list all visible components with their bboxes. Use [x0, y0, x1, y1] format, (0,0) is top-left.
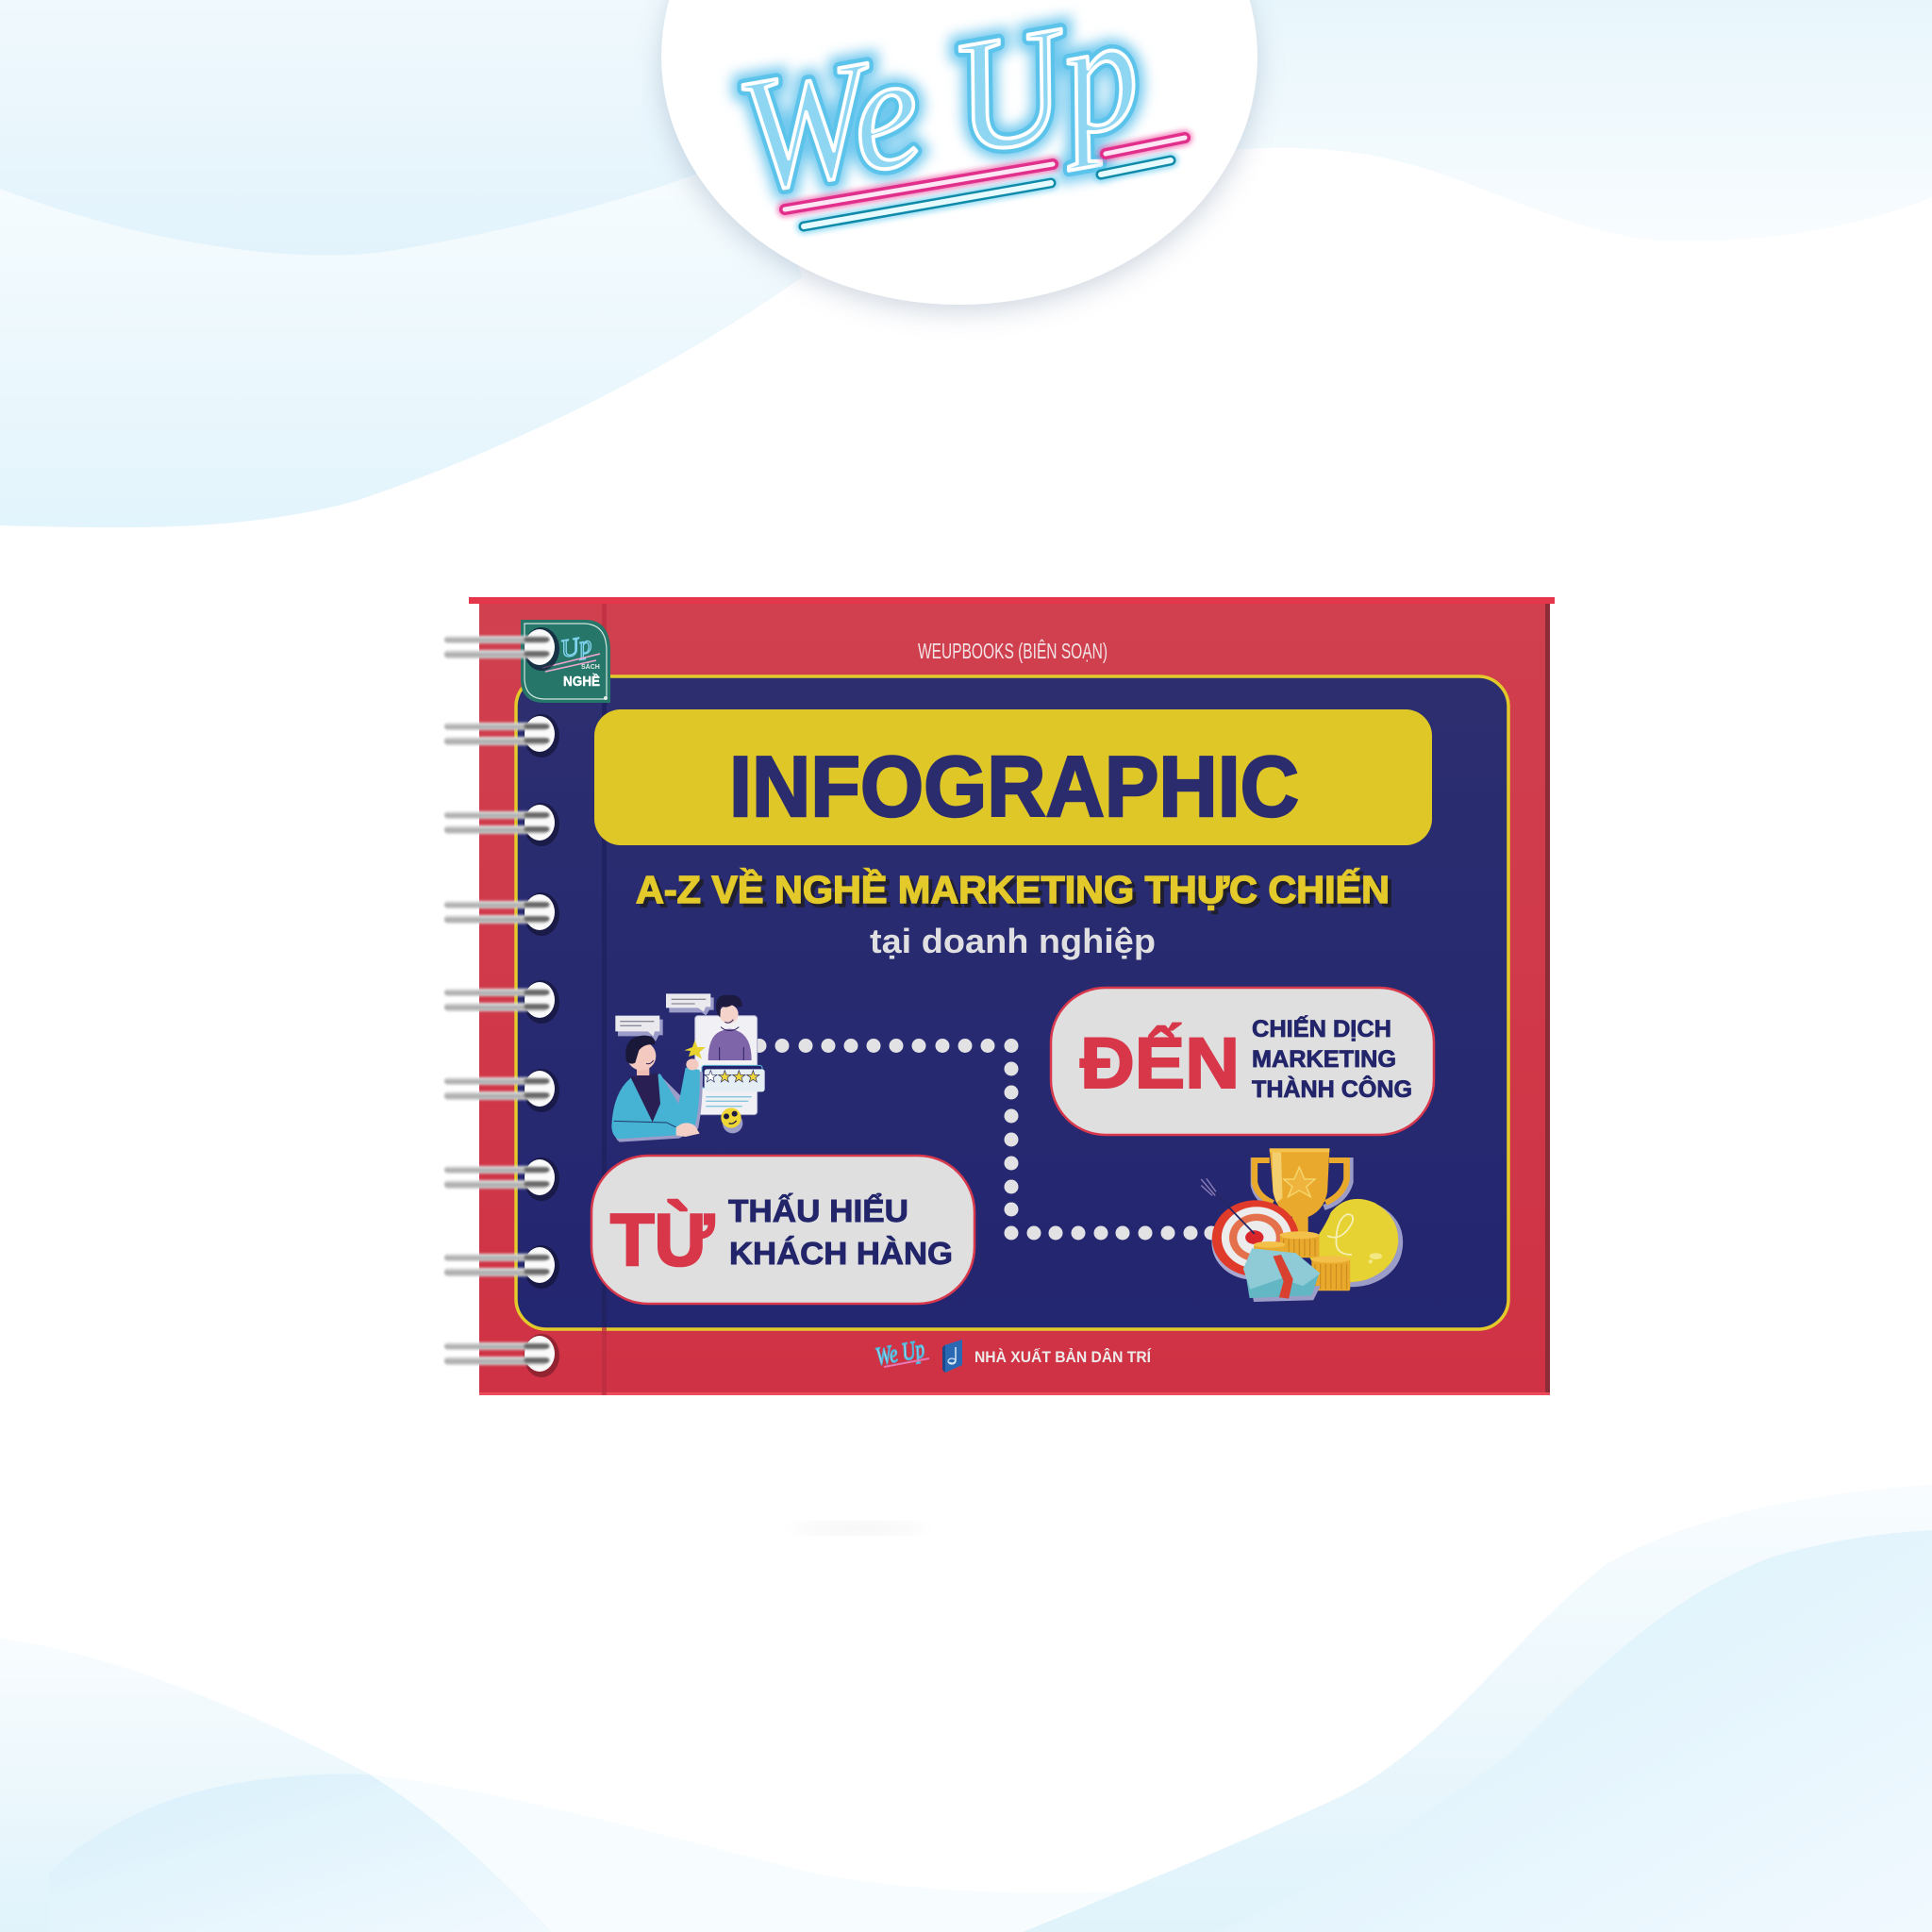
text: Thành công: THÀNH CÔNG [1252, 1074, 1412, 1103]
spiral hole 4 [444, 892, 559, 936]
text: Khách hàng: KHÁCH HÀNG [729, 1236, 953, 1271]
neon underlines [785, 138, 1185, 226]
spine fold [602, 604, 607, 1395]
cover: red base [479, 604, 1550, 1395]
logo: small WeUp: We Up [874, 1334, 926, 1371]
icon: trophy, target, coins, money and bulb illustration [1201, 1148, 1403, 1302]
spiral hole 6 [444, 1069, 559, 1112]
smiley [721, 1108, 742, 1133]
title banner: yellow box [594, 709, 1432, 845]
label: TỪ: TỪ [610, 1198, 714, 1281]
subtitle: A-Z về nghề marketing thực chiến: A-Z VỀ NGHỀ MARKETING THỰC CHIẾN [636, 868, 1390, 911]
target [1211, 1200, 1299, 1280]
header: white ellipse logo badge [661, 0, 1257, 311]
sticker logo text: Up [558, 630, 594, 663]
spiral hole 3 [444, 803, 559, 846]
speech bubble top [666, 993, 714, 1016]
man in blue jacket [611, 1036, 703, 1142]
icon: publisher book [942, 1340, 962, 1373]
spiral hole 5 [444, 980, 559, 1024]
star held by man [684, 1041, 706, 1059]
footer: publisher logos [874, 1334, 1152, 1373]
panel: navy cover panel with yellow border [516, 676, 1508, 1329]
bottom edge highlight [479, 1392, 1550, 1395]
dotted connector path [753, 1039, 1219, 1240]
rating panel with stars [702, 1065, 765, 1107]
trophy [1254, 1148, 1350, 1236]
right edge shade [1545, 604, 1550, 1395]
sticker neon line [542, 654, 600, 672]
callout pill: TỪ [591, 1156, 974, 1304]
subtitle: tại doanh nghiệp: tại doanh nghiệp [870, 922, 1156, 960]
faint shadow below book [792, 1524, 924, 1533]
subtitle: A-Z về nghề marketing thực chiến: A-Z VỀ NGHỀ MARKETING THỰC CHIẾN [640, 872, 1393, 915]
icon: people and customer reviews illustration [611, 993, 765, 1142]
sticker dot [604, 696, 608, 700]
text: author credit: WEUPBOOKS (BIÊN SOẠN) [918, 639, 1108, 663]
sticker: Sách Nghề green badge [521, 620, 610, 703]
spiral hole 7 [444, 1158, 559, 1201]
arrow [1201, 1178, 1255, 1234]
spiral hole 1 [444, 627, 559, 671]
label: ĐẾN: ĐẾN [1080, 1024, 1240, 1104]
spiral hole 9 [444, 1334, 559, 1377]
text: Chiến dịch: CHIẾN DỊCH [1252, 1015, 1391, 1042]
coin stacks [1254, 1231, 1350, 1291]
text: Marketing: MARKETING [1252, 1046, 1396, 1073]
bundle of money [1243, 1248, 1321, 1302]
speech bubble left [615, 1016, 663, 1041]
light bulb [1307, 1199, 1403, 1287]
callout pill: ĐẾN [1051, 988, 1434, 1135]
top edge strip [469, 597, 1555, 604]
spiral hole 2 [444, 714, 559, 758]
spiral hole 8 [444, 1245, 559, 1289]
text: publisher name: NHÀ XUẤT BẢN DÂN TRÍ [974, 1348, 1152, 1366]
title: INFOGRAPHIC: INFOGRAPHIC [729, 740, 1299, 835]
sticker text: Sách: SÁCH [581, 662, 600, 671]
profile card [695, 995, 758, 1115]
text: Thấu hiểu: THẤU HIỂU [728, 1193, 908, 1228]
sticker text: Nghề: NGHỀ [563, 674, 600, 690]
book: spiral notebook cover [444, 597, 1555, 1395]
